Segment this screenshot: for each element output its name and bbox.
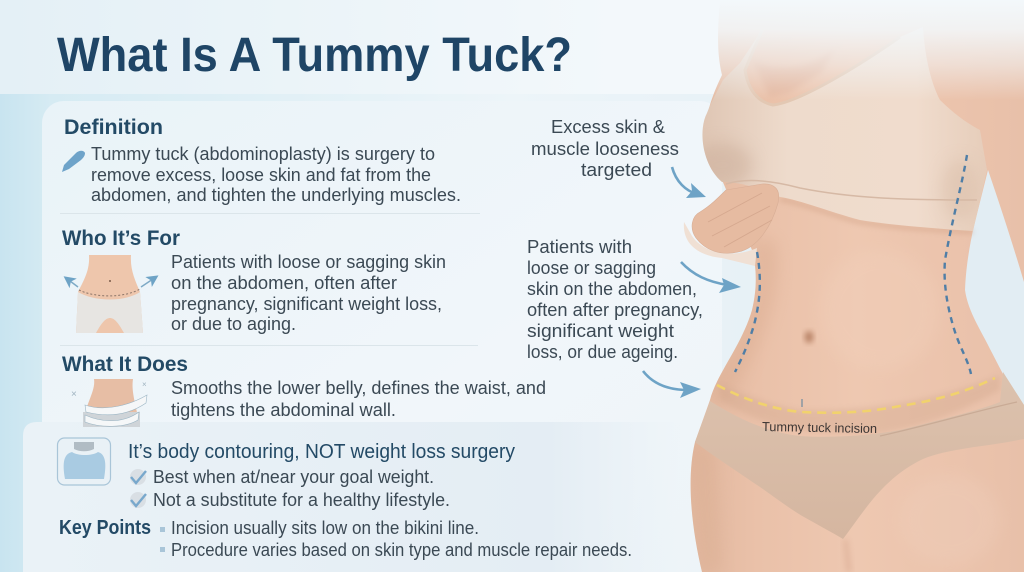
definition text: remove excess, loose skin and fat from the — [91, 165, 431, 185]
fabric held under hand — [684, 222, 757, 266]
what text: tightens the abdominal wall. — [171, 400, 396, 420]
key points heading: Key Points — [59, 517, 151, 539]
what text — [171, 378, 546, 420]
arrow: to abdomen — [681, 262, 741, 293]
definition text — [91, 144, 461, 205]
torso skin — [691, 0, 1024, 572]
icon: waist with tape measure: × — [142, 380, 147, 389]
icon: waist with tape measure: × — [71, 389, 77, 400]
check text 2: Not a substitute for a healthy lifestyle. — [153, 490, 450, 510]
definition heading: Definition — [64, 116, 163, 139]
icon: weighing scale — [58, 438, 110, 485]
hand — [692, 184, 779, 253]
soft body shading — [690, 240, 1000, 572]
callout: excess skin: targeted — [581, 160, 652, 180]
arrow: to incision — [643, 371, 701, 398]
blue dashed contour left — [735, 252, 760, 372]
who text: or due to aging. — [171, 314, 296, 334]
figure: torso photo illustration — [684, 0, 1024, 572]
bra shading — [692, 143, 978, 220]
callout: patients: Patients with — [527, 237, 632, 257]
callout: patients: loss, or due ageing. — [527, 342, 678, 362]
icon: torso with arrows — [66, 255, 156, 333]
callout: excess skin: muscle looseness — [531, 139, 679, 159]
section: key points — [59, 517, 632, 560]
callout: excess skin — [531, 117, 679, 180]
gap between arm and waist — [965, 170, 1024, 405]
callout: excess skin: Excess skin & — [551, 117, 665, 137]
incision label: Tummy tuck incision — [762, 419, 877, 436]
bra neckline band — [745, 30, 900, 105]
icon: pen marker — [62, 151, 85, 172]
cleavage shadow — [752, 48, 835, 97]
icon: waist with tape measure — [71, 379, 147, 427]
what text: Smooths the lower belly, defines the waist, and — [171, 378, 546, 398]
check icon 1 — [130, 469, 146, 485]
who text — [171, 252, 446, 334]
check text 1: Best when at/near your goal weight. — [153, 467, 434, 487]
bra — [702, 27, 987, 231]
yellow incision line — [717, 378, 995, 413]
midline mark — [801, 399, 803, 407]
arrow: to bra edge — [672, 167, 706, 198]
definition text: Tummy tuck (abdominoplasty) is surgery to — [91, 144, 435, 164]
navel — [804, 331, 814, 343]
callout: patients: loose or sagging — [527, 258, 656, 278]
callout: patients: skin on the abdomen, — [527, 279, 697, 299]
callout: patients: significant weight — [527, 321, 674, 341]
underwear — [695, 372, 1024, 539]
check icon 2 — [130, 492, 146, 508]
section: who it's for — [62, 227, 446, 334]
contouring heading: It’s body contouring, NOT weight loss surgery — [128, 441, 515, 463]
callout: patients — [527, 237, 703, 362]
panel: information card — [42, 101, 722, 572]
title: What Is A Tummy Tuck? — [57, 29, 572, 82]
bullet 2: Procedure varies based on skin type and muscle repair needs. — [171, 540, 632, 560]
section: body contouring — [58, 438, 515, 510]
callout: patients: often after pregnancy, — [527, 300, 703, 320]
definition text: abdomen, and tighten the underlying muscles. — [91, 185, 461, 205]
section: what it does — [62, 353, 546, 427]
title band — [0, 0, 1024, 94]
who text: on the abdomen, often after — [171, 273, 397, 293]
who text: Patients with loose or sagging skin — [171, 252, 446, 272]
bottom panel — [23, 422, 680, 572]
bra folds — [726, 181, 977, 200]
waistband edge — [880, 402, 1017, 436]
section: definition — [62, 116, 461, 205]
under-bra shadow — [780, 199, 973, 232]
blue dashed contour right — [945, 155, 971, 374]
fade over top of figure — [700, 0, 1024, 100]
who heading: Who It’s For — [62, 227, 180, 250]
what heading: What It Does — [62, 353, 188, 376]
bullet 1: Incision usually sits low on the bikini line. — [171, 518, 479, 538]
who text: pregnancy, significant weight loss, — [171, 294, 442, 314]
